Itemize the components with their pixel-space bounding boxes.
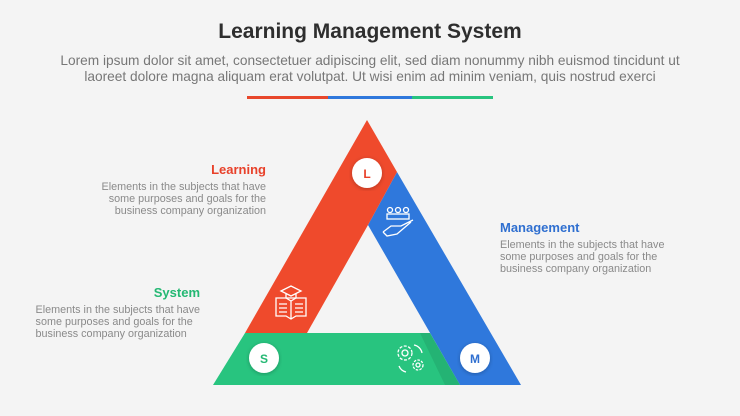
text: learning [102,162,266,217]
subtitle: laoreet dolore magna aliquam erat volutpat. Ut wisi enim ad minim veniam, quis nostrud exerci [84,68,656,84]
text: management: some purposes and goals for the [500,251,657,263]
icon: people on hand [383,208,413,236]
circle S: S [260,352,268,366]
circle L [352,158,382,188]
text: management: business company organization [500,263,651,275]
icon: book with cap [276,286,306,319]
text: management: Management [500,220,579,235]
icon: gears [398,345,423,372]
text: learning: some purposes and goals for the [109,193,266,205]
circle M: M [470,352,480,366]
subtitle [60,53,680,84]
blue band [368,172,521,385]
text: system [36,285,200,340]
text: system: Elements in the subjects that have [36,304,200,316]
text: system: business company organization [36,328,187,340]
text: management [500,220,664,275]
text: learning: business company organization [115,205,266,217]
text: learning: Elements in the subjects that have [102,181,266,193]
text: management: Elements in the subjects that have [500,239,664,251]
subtitle: Lorem ipsum dolor sit amet, consectetuer adipiscing elit, sed diam nonummy nibh euismod tincidunt ut [60,53,680,68]
circle M [460,343,490,373]
green band [213,333,460,385]
circle L: L [363,167,371,181]
text: system: System [154,285,200,300]
color underline [247,96,493,99]
text: learning: Learning [211,162,266,177]
text: system: some purposes and goals for the [36,316,193,328]
circle S [249,343,279,373]
title: Learning Management System [218,20,522,43]
red band [245,120,397,333]
